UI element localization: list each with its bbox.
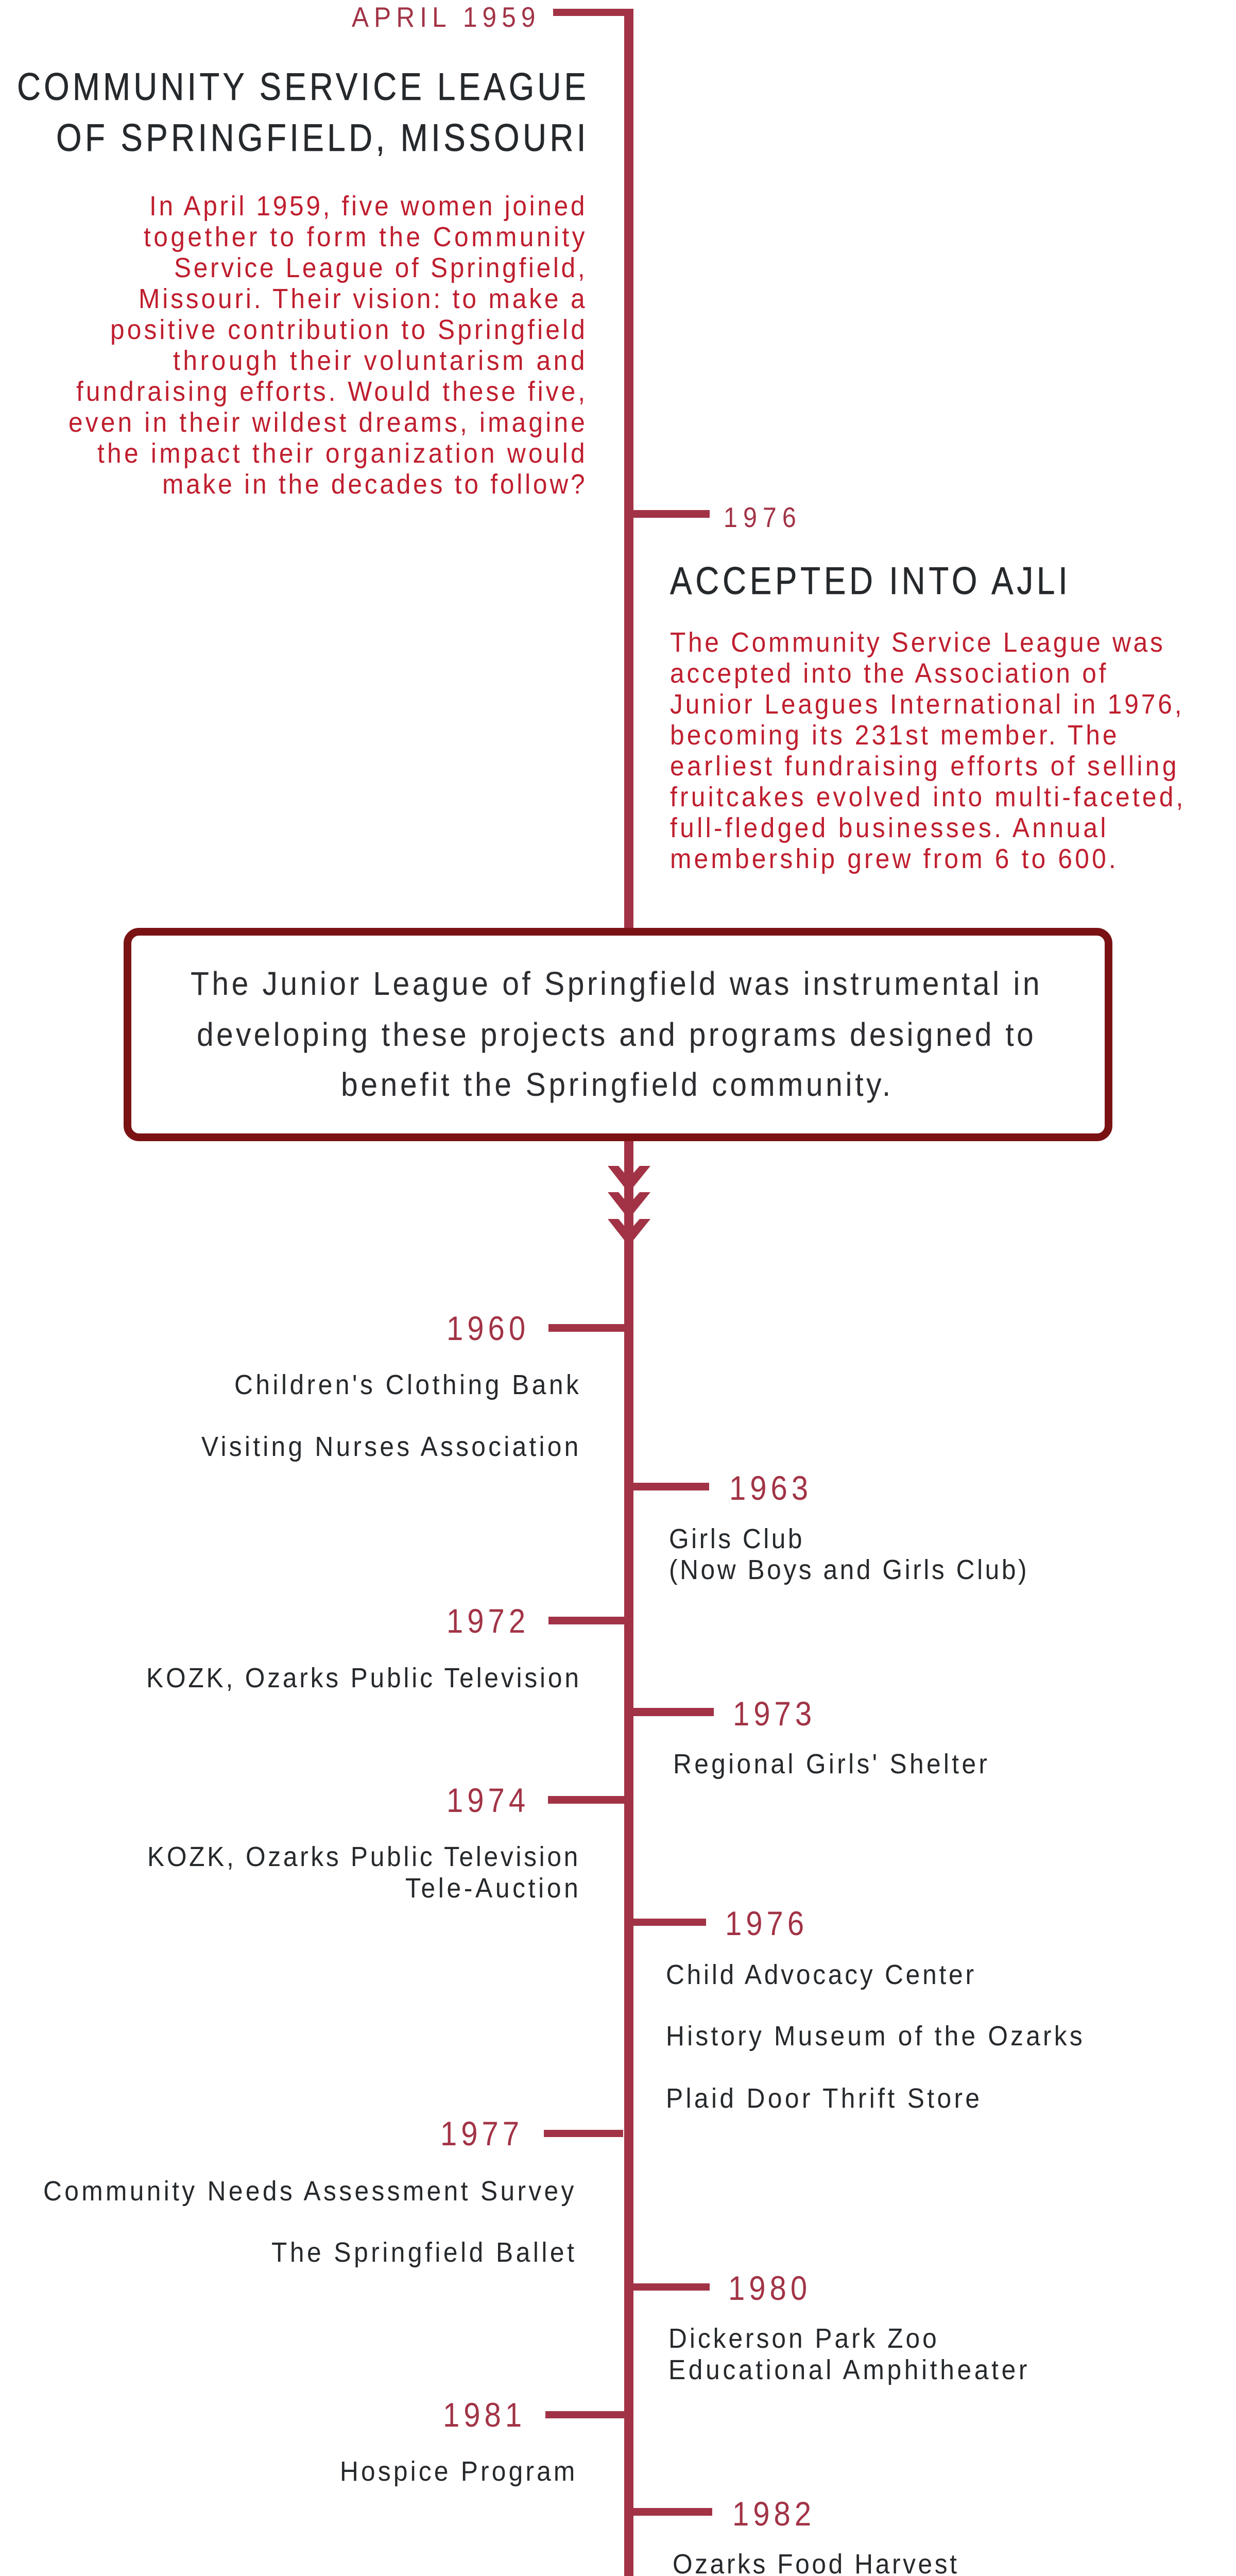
milestone: 1973: 1973 [733, 1696, 812, 1733]
text block: AJLI story: The Community Service League was [670, 626, 1163, 657]
text block: AJLI story: membership grew from 6 to 600. [670, 843, 1116, 874]
milestone: 1960: Visiting Nurses Association [201, 1431, 578, 1462]
text block: founding story: fundraising efforts. Would these five, [76, 376, 585, 406]
milestone: 1977: The Springfield Ballet [271, 2236, 574, 2267]
callout text: benefit the Springfield community. [341, 1066, 890, 1104]
text block: AJLI story: fruitcakes evolved into multi-faceted, [670, 781, 1183, 812]
milestone: 1973 [632, 1696, 987, 1779]
text block: founding story: the impact their organization would [97, 437, 585, 468]
text block: founding story: even in their wildest dreams, imagine [68, 406, 585, 437]
milestone: 1972 [146, 1603, 626, 1693]
milestone: 1960 [201, 1310, 626, 1462]
milestone: 1980 [632, 2270, 1027, 2385]
text block: founding story: Missouri. Their vision: to make a [139, 283, 585, 314]
milestone: 1976: Plaid Door Thrift Store [666, 2082, 980, 2113]
text block: founding story: make in the decades to follow? [162, 468, 585, 499]
milestone: 1972: KOZK, Ozarks Public Television [146, 1662, 579, 1693]
milestone: 1963: Girls Club [669, 1523, 802, 1554]
milestone: 1963: (Now Boys and Girls Club) [669, 1554, 1027, 1585]
milestone: 1963 [632, 1470, 1027, 1585]
heading: Accepted into AJLI: ACCEPTED INTO AJLI [670, 559, 1068, 602]
text block: AJLI story: full-fledged businesses. Annual [670, 812, 1106, 843]
date: April 1959: APRIL 1959 [352, 2, 535, 33]
callout box [128, 931, 1108, 1138]
milestone: 1976 [632, 1905, 1083, 2113]
milestone: 1976: 1976 [725, 1905, 804, 1943]
milestone: 1974: 1974 [447, 1782, 525, 1820]
milestone: 1981 [340, 2397, 625, 2486]
text block: AJLI story: earliest fundraising efforts of selling [670, 750, 1176, 781]
date: 1976: 1976 [724, 501, 796, 533]
milestone: 1960: 1960 [447, 1310, 525, 1348]
milestone: 1973: Regional Girls' Shelter [673, 1748, 987, 1779]
text block: founding story: together to form the Community [144, 221, 585, 252]
milestone: 1980: Dickerson Park Zoo [668, 2323, 937, 2353]
milestone: 1977 [43, 2115, 623, 2267]
callout text [191, 965, 1040, 1104]
milestone: 1960: Children's Clothing Bank [234, 1369, 579, 1400]
heading: Community Service League: COMMUNITY SERVICE LEAGUE [17, 65, 586, 108]
arrow: triple chevrons [608, 1166, 650, 1240]
text block: founding story: through their voluntarism and [173, 345, 585, 376]
milestone: 1974: Tele-Auction [405, 1872, 578, 1903]
text block: AJLI story: Junior Leagues International in 1976, [670, 688, 1182, 719]
milestone: 1972: 1972 [447, 1603, 525, 1640]
tick: 1976 [632, 510, 710, 518]
milestone: 1980: 1980 [728, 2270, 807, 2308]
text block: founding story: In April 1959, five women joined [149, 190, 585, 221]
milestone: 1976: History Museum of the Ozarks [666, 2020, 1083, 2051]
text block: founding story: Service League of Springfield, [174, 252, 585, 283]
callout frame [128, 931, 1108, 1138]
timeline spine [624, 9, 633, 2576]
text block: founding story [68, 190, 585, 499]
milestone: 1980: Educational Amphitheater [668, 2354, 1027, 2385]
tick: April 1959 [553, 9, 625, 16]
milestone: 1974: KOZK, Ozarks Public Television [147, 1841, 578, 1872]
milestone: 1977: 1977 [440, 2115, 519, 2153]
milestone: 1974 [147, 1782, 625, 1903]
text block: AJLI story: becoming its 231st member. The [670, 719, 1117, 750]
heading: Community Service League: OF SPRINGFIELD, MISSOURI [56, 116, 586, 159]
milestone: 1982 [632, 2496, 957, 2576]
milestone: 1981: 1981 [443, 2397, 522, 2434]
text block: founding story: positive contribution to Springfield [110, 314, 585, 345]
milestone: April 1959 [17, 2, 625, 499]
milestone: 1976 AJLI [632, 501, 1183, 874]
milestone: 1981: Hospice Program [340, 2455, 575, 2486]
text block: AJLI story [670, 626, 1183, 874]
text block: AJLI story: accepted into the Association of [670, 657, 1106, 688]
heading: Community Service League [17, 65, 586, 159]
milestone: 1977: Community Needs Assessment Survey [43, 2175, 574, 2206]
milestone: 1982: 1982 [732, 2496, 811, 2533]
callout text: The Junior League of Springfield was instrumental in [191, 965, 1040, 1003]
milestone: 1976: Child Advocacy Center [666, 1959, 974, 1990]
callout text: developing these projects and programs designed to [197, 1016, 1034, 1054]
milestone: 1963: 1963 [729, 1470, 808, 1507]
